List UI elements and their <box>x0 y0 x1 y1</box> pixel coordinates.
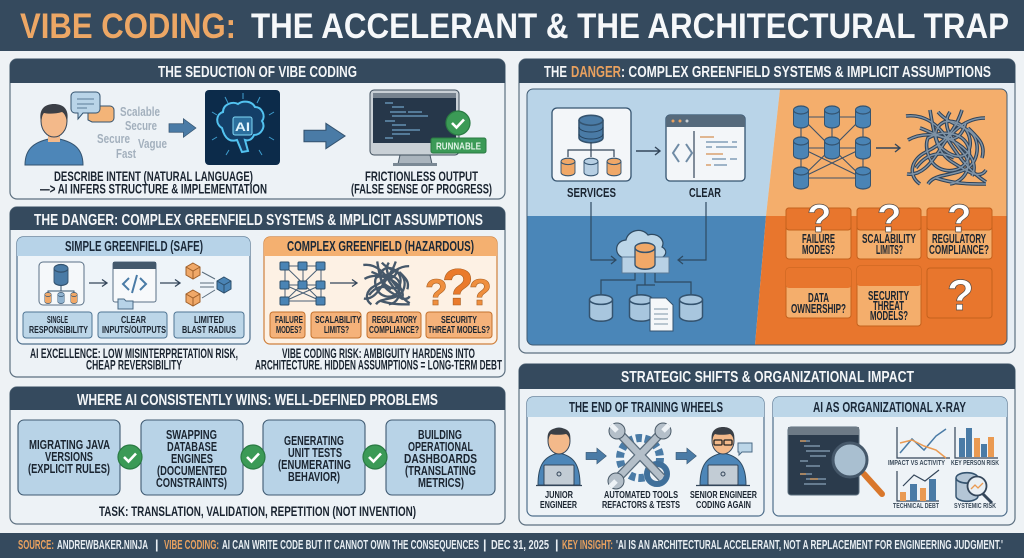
connector lines to cloud <box>591 202 706 264</box>
panel: where AI consistently wins <box>10 387 505 524</box>
sub-panel: simple greenfield: SIMPLE GREENFIELD (SAFE) <box>65 238 203 255</box>
panel: the danger, large diagram: DANGER <box>571 64 621 81</box>
label: clear: CLEAR <box>689 185 721 200</box>
icon: tangled wires <box>363 261 410 304</box>
icon: question marks <box>425 259 492 317</box>
card: generating unit tests: GENERATING <box>284 434 344 448</box>
quadrant background <box>527 89 1007 345</box>
arrow <box>304 123 345 149</box>
panel: the seduction of vibe coding: THE SEDUCTION OF VIBE CODING <box>158 64 357 81</box>
label boxes: simple greenfield traits: BLAST RADIUS <box>182 325 236 336</box>
chart: impact vs activity <box>897 427 950 458</box>
card: swapping database engines: SWAPPING <box>166 428 217 442</box>
grid: unanswered questions: COMPLIANCE? <box>929 243 989 257</box>
label boxes: hazards: MODES? <box>276 325 302 336</box>
card: migrating java versions: MIGRATING JAVA <box>29 438 110 452</box>
sub-panel: complex greenfield: COMPLEX GREENFIELD (HAZARDOUS) <box>287 238 474 255</box>
arrow <box>169 119 196 137</box>
grid: unanswered questions: MODES? <box>802 243 835 257</box>
icon: monitor with runnable code: RUNNABLE <box>436 142 481 152</box>
icon: tangled service network <box>794 106 870 189</box>
panel: the seduction of vibe coding <box>10 59 505 199</box>
footer bar: DEC 31, 2025 <box>491 538 549 552</box>
captions: training wheels steps: CODING AGAIN <box>696 500 751 511</box>
grid: unanswered questions: SCALABILITY <box>862 232 916 246</box>
footer bar: KEY INSIGHT: <box>562 538 613 552</box>
icon: code under magnifier <box>788 427 882 495</box>
card: swapping database engines: ENGINES <box>171 452 213 466</box>
caption: vibe coding risk: VIBE CODING RISK: AMBIGUITY HARDENS INTO <box>282 345 475 361</box>
label boxes: hazards: REGULATORY <box>372 315 417 326</box>
sub-panel: end of training wheels <box>527 397 764 516</box>
grid: unanswered questions <box>786 197 992 326</box>
label: systemic risk: SYSTEMIC RISK <box>954 501 996 510</box>
label boxes: simple greenfield traits: CLEAR <box>121 315 147 326</box>
grid: unanswered questions: THREAT <box>873 299 904 313</box>
card: migrating java versions: VERSIONS <box>45 450 93 464</box>
panel: the danger, large diagram <box>519 59 1015 353</box>
icon: database service <box>39 262 84 305</box>
footer bar: AI CAN WRITE CODE BUT IT CANNOT OWN THE CONSEQUENCES <box>222 538 479 552</box>
label boxes: simple greenfield traits: INPUTS/OUTPUTS <box>102 325 166 336</box>
grid: unanswered questions: MODELS? <box>870 309 908 323</box>
arrow <box>636 147 660 155</box>
icon: code window <box>113 262 156 309</box>
captions: training wheels steps: ENGINEER <box>540 500 578 511</box>
sub-panel: complex greenfield <box>264 237 497 344</box>
label: key person risk: KEY PERSON RISK <box>951 458 999 467</box>
footer bar: | <box>555 538 558 552</box>
grid: unanswered questions: ? <box>877 197 901 241</box>
panel: strategic shifts <box>519 364 1015 525</box>
grid: unanswered questions: ? <box>807 197 831 241</box>
footer bar: | <box>483 538 486 552</box>
vague requirement words <box>97 104 167 161</box>
vague requirement words: Vague <box>138 136 167 151</box>
caption: frictionless output: (FALSE SENSE OF PROGRESS) <box>351 180 492 196</box>
caption: frictionless output: FRICTIONLESS OUTPUT <box>365 168 478 184</box>
arrow <box>330 280 357 286</box>
caption: AI excellence: CHEAP REVERSIBILITY <box>86 356 182 372</box>
card: building operational dashboards <box>386 420 495 495</box>
card: building operational dashboards: DASHBOARDS <box>404 452 477 466</box>
label boxes: simple greenfield traits: RESPONSIBILITY <box>29 325 88 336</box>
grid: unanswered questions: FAILURE <box>802 232 835 246</box>
caption: AI excellence: AI EXCELLENCE: LOW MISINTERPRETATION RISK, <box>30 345 238 361</box>
panel: the danger, simple vs complex <box>10 207 505 377</box>
footer bar: ANDREWBAKER.NINJA <box>57 538 148 552</box>
vague requirement words: Secure <box>97 131 130 146</box>
label boxes: hazards: FAILURE <box>275 315 303 326</box>
icon: question marks: ? <box>425 272 448 313</box>
icon: cubes, limited blast radius <box>186 263 231 306</box>
captions: training wheels steps: AUTOMATED TOOLS <box>604 490 678 501</box>
chart: technical debt <box>897 470 939 501</box>
icon: cloud platform with databases <box>590 230 702 331</box>
chart: key person risk <box>955 427 998 458</box>
card: migrating java versions <box>18 420 120 495</box>
card: generating unit tests: BEHAVIOR) <box>288 470 340 484</box>
vague requirement words: Scalable <box>120 104 160 119</box>
caption: describe intent: —> AI INFERS STRUCTURE & IMPLEMENTATION <box>40 180 267 196</box>
card: building operational dashboards: BUILDING <box>418 428 462 442</box>
icon: question marks: ? <box>469 272 492 313</box>
label: services: SERVICES <box>567 185 616 200</box>
panel: the danger, simple vs complex: THE DANGER: COMPLEX GREENFIELD SYSTEMS & IMPLICIT ASSUMPTIONS <box>34 212 483 229</box>
icon: junior engineer <box>536 428 582 486</box>
icon: service database card <box>552 108 631 181</box>
icon: service network <box>280 262 325 305</box>
caption: vibe coding risk <box>255 345 502 372</box>
label boxes: hazards: SECURITY <box>441 315 477 326</box>
caption: describe intent: DESCRIBE INTENT (NATURAL LANGUAGE) <box>54 168 253 184</box>
vague requirement words: Secure <box>125 118 157 133</box>
icon: person describing intent <box>25 104 83 165</box>
label boxes: hazards: THREAT MODELS? <box>428 325 490 336</box>
arrow <box>160 280 180 286</box>
arrow <box>586 448 606 464</box>
grid: unanswered questions: SECURITY <box>868 289 909 303</box>
icon: AI brain <box>205 90 280 165</box>
card: swapping database engines: DATABASE <box>167 440 217 454</box>
caption: frictionless output <box>351 168 492 196</box>
grid: unanswered questions: DATA <box>808 291 829 305</box>
label boxes: hazards: COMPLIANCE? <box>369 325 419 336</box>
icon: crossed wrenches and gears <box>608 423 671 489</box>
captions: training wheels steps: REFACTORS & TESTS <box>602 500 680 511</box>
icon: speech bubbles <box>71 92 114 122</box>
vague requirement words: Fast <box>116 146 136 161</box>
captions: training wheels steps: SENIOR ENGINEER <box>690 490 758 501</box>
card: migrating java versions: (EXPLICIT RULES) <box>28 462 110 476</box>
footer bar: VIBE CODING: <box>164 538 219 552</box>
card: swapping database engines <box>141 420 243 495</box>
label boxes: simple greenfield traits: LIMITED <box>194 315 224 326</box>
captions: training wheels steps: JUNIOR <box>545 490 574 501</box>
arrow <box>89 280 107 286</box>
icon: systemic risk <box>956 473 992 503</box>
card: swapping database engines: CONSTRAINTS) <box>156 476 227 490</box>
sub-panel: simple greenfield <box>17 237 250 344</box>
icon: tangled wires <box>906 110 986 184</box>
title banner <box>0 0 1024 51</box>
label boxes: simple greenfield traits <box>23 312 244 338</box>
panel: where AI consistently wins: WHERE AI CONSISTENTLY WINS: WELL-DEFINED PROBLEMS <box>77 392 438 409</box>
icon: monitor with runnable code <box>370 90 486 166</box>
captions: training wheels steps <box>540 490 758 511</box>
footer bar <box>0 533 1024 558</box>
caption: AI excellence <box>30 345 238 372</box>
footer bar: SOURCE: <box>18 538 54 552</box>
grid: unanswered questions: REGULATORY <box>932 232 986 246</box>
card: building operational dashboards: OPERATIONAL <box>408 440 473 454</box>
arrow <box>876 144 900 152</box>
card: swapping database engines: (DOCUMENTED <box>157 464 227 478</box>
icon: code window <box>666 115 745 181</box>
grid: unanswered questions: ? <box>947 271 974 320</box>
grid: unanswered questions: OWNERSHIP? <box>791 302 846 316</box>
card: generating unit tests: UNIT TESTS <box>288 446 342 460</box>
sub-panel: AI as organizational x-ray <box>773 397 1007 516</box>
card: building operational dashboards: (TRANSLATING <box>405 464 476 478</box>
card: generating unit tests <box>263 420 365 495</box>
card: building operational dashboards: METRICS) <box>418 476 464 490</box>
card: generating unit tests: (ENUMERATING <box>278 458 351 472</box>
grid: unanswered questions: LIMITS? <box>876 243 903 257</box>
footer bar: | <box>155 538 158 552</box>
panel: the danger, large diagram: THE <box>544 64 567 81</box>
icon: question marks: ? <box>442 259 474 317</box>
caption: vibe coding risk: ARCHITECTURE. HIDDEN ASSUMPTIONS = LONG-TERM DEBT <box>255 356 502 372</box>
label boxes: hazards: LIMITS? <box>324 325 349 336</box>
icon: AI brain: AI <box>235 120 250 134</box>
icons: green checks <box>118 445 387 469</box>
sub-panel: end of training wheels: THE END OF TRAINING WHEELS <box>569 399 723 416</box>
label: technical debt: TECHNICAL DEBT <box>893 501 939 510</box>
panel: strategic shifts: STRATEGIC SHIFTS & ORGANIZATIONAL IMPACT <box>621 369 914 386</box>
icon: senior engineer coding <box>696 427 752 486</box>
label boxes: hazards: SCALABILITY <box>315 315 361 326</box>
label boxes: hazards <box>270 312 492 338</box>
caption: task summary: TASK: TRANSLATION, VALIDATION, REPETITION (NOT INVENTION) <box>99 503 416 519</box>
caption: describe intent <box>40 168 267 196</box>
label: impact vs activity: IMPACT VS ACTIVITY <box>888 458 945 467</box>
title banner: VIBE CODING: <box>20 7 236 46</box>
grid: unanswered questions: ? <box>947 197 971 241</box>
label boxes: simple greenfield traits: SINGLE <box>47 315 68 326</box>
arrow <box>676 448 696 464</box>
